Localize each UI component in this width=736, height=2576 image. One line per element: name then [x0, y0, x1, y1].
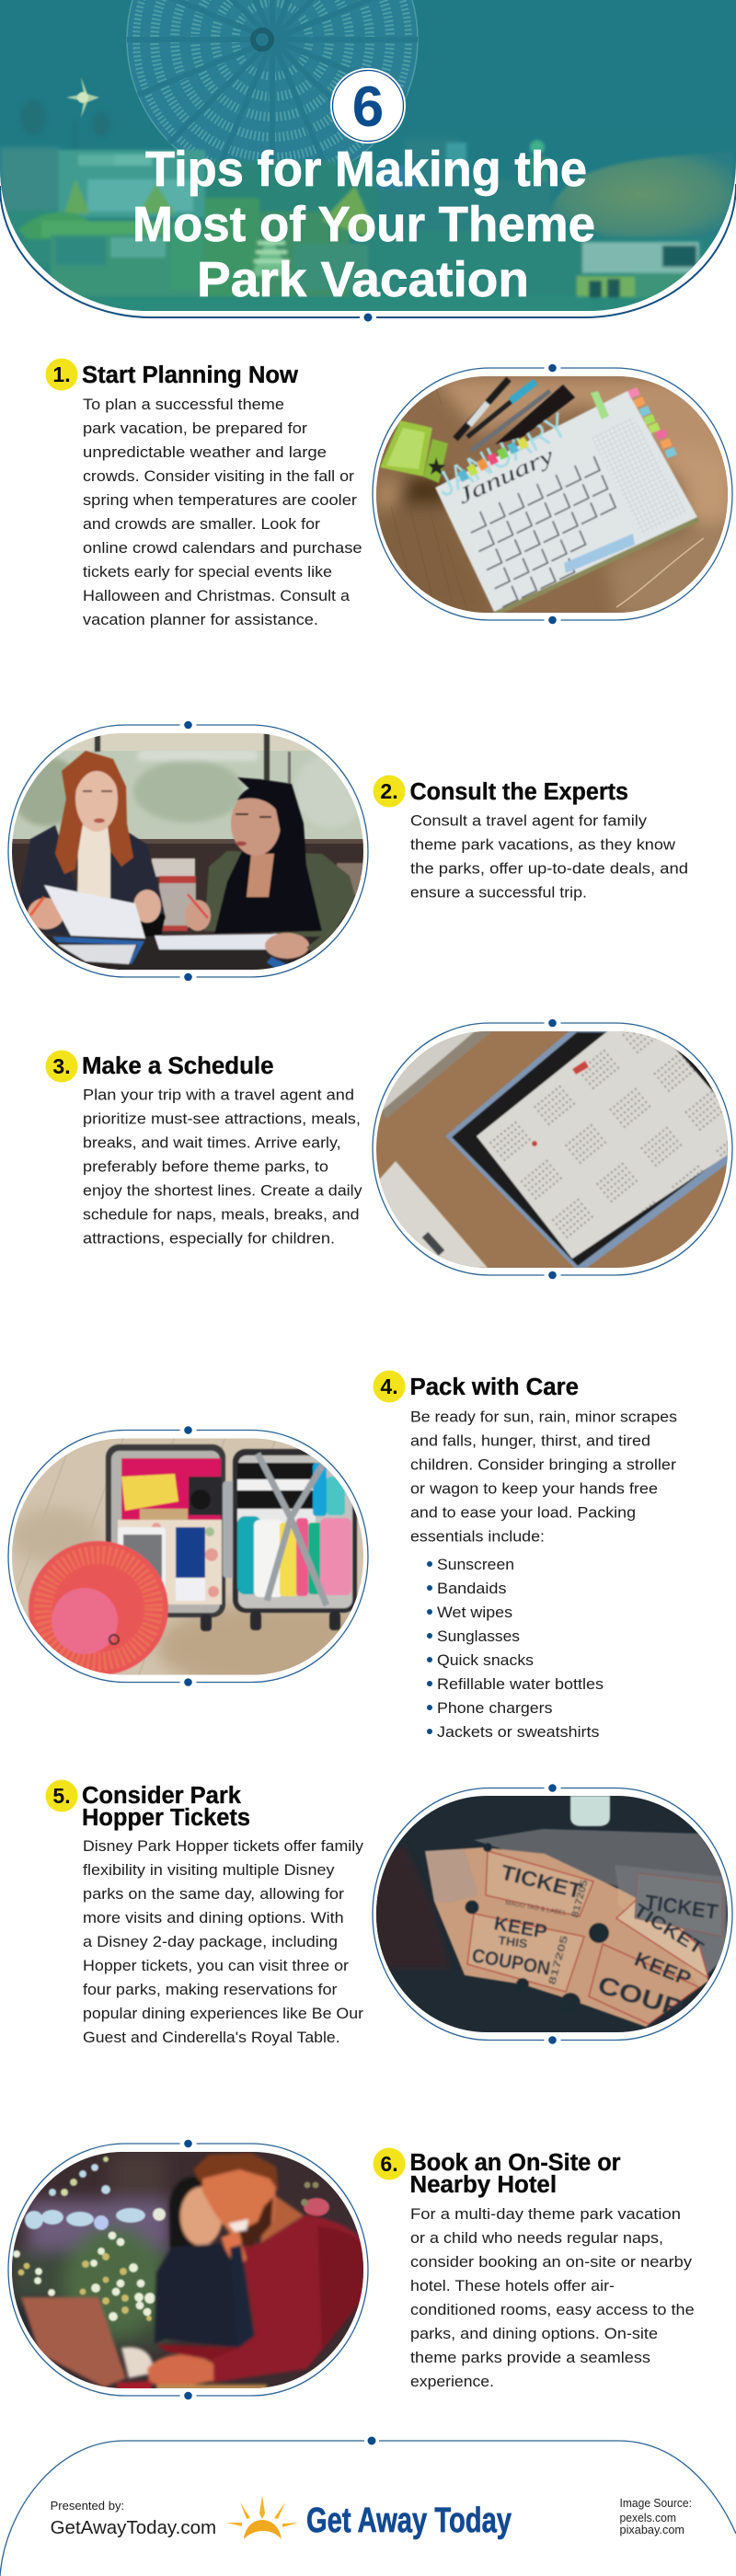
photo outline 3: [373, 1019, 732, 1279]
title: Tips for Making the: [145, 142, 587, 197]
presented by: Presented by:: [51, 2499, 124, 2513]
body text 3: enjoy the shortest lines. Create a daily: [83, 1183, 362, 1200]
badge: number 3: [46, 1051, 77, 1082]
photo outline 2: [8, 721, 368, 981]
body text 1: online crowd calendars and purchase: [83, 540, 362, 557]
section 6: book an on-site or nearby hotel: [7, 2140, 695, 2399]
body text 3: Plan your trip with a travel agent and: [83, 1087, 354, 1104]
body text 4: and falls, hunger, thirst, and tired: [410, 1433, 650, 1450]
number badge: 6: [330, 68, 406, 144]
body text 1: tickets early for special events like: [83, 564, 332, 581]
body text 1: and crowds are smaller. Look for: [83, 516, 321, 533]
title: [132, 142, 595, 307]
footer outline with dot: [0, 2436, 736, 2576]
footer: [0, 2436, 736, 2576]
body text 5: Guest and Cinderella's Royal Table.: [83, 2030, 340, 2046]
body text 4: [410, 1409, 677, 1546]
badge: number 1: [46, 359, 77, 390]
badge: number 1: 1.: [52, 362, 71, 386]
badge: number 2: 2.: [380, 779, 398, 803]
body text 4: Be ready for sun, rain, minor scrapes: [410, 1409, 677, 1426]
packing essentials list: [427, 1557, 604, 1741]
packing essentials list: Sunglasses: [437, 1628, 520, 1645]
badge: number 3: 3.: [52, 1054, 71, 1078]
packing essentials list: Jackets or sweatshirts: [437, 1724, 600, 1741]
body text 1: unpredictable weather and large: [83, 444, 327, 461]
badge: number 5: [46, 1779, 77, 1812]
heading 6: Book an On-Site or: [410, 2150, 621, 2176]
heading 6: [410, 2150, 621, 2198]
body text 2: Consult a travel agent for family: [410, 813, 648, 830]
photo: roll of vintage paper tickets: TICKET: [629, 1901, 707, 1959]
body text 6: or a child who needs regular naps,: [410, 2230, 663, 2247]
icon: sun: [226, 2495, 298, 2539]
body text 2: ensure a successful trip.: [410, 885, 587, 902]
presented by: [51, 2499, 216, 2538]
heading 5: Consider Park: [82, 1783, 242, 1809]
photo: roll of vintage paper tickets: KEEP: [492, 1913, 548, 1943]
number badge: 6: 6: [352, 75, 384, 139]
photo: roll of vintage paper tickets: 817205: [546, 1935, 570, 1986]
photo: roll of vintage paper tickets: [373, 1784, 733, 2044]
packing essentials list: Sunscreen: [437, 1557, 514, 1573]
packing essentials list: Bandaids: [437, 1581, 506, 1597]
body text 3: preferably before theme parks, to: [83, 1159, 328, 1176]
body text 1: vacation planner for assistance.: [83, 612, 318, 628]
body text 5: Hopper tickets, you can visit three or: [83, 1958, 350, 1974]
body text 5: flexibility in visiting multiple Disney: [83, 1862, 335, 1879]
body text 3: [83, 1087, 362, 1248]
body text 1: park vacation, be prepared for: [83, 420, 308, 437]
header outline with dot: [0, 184, 736, 322]
heading 5: [82, 1783, 250, 1831]
title: Park Vacation: [197, 252, 529, 307]
packing essentials list: Phone chargers: [437, 1700, 552, 1717]
heading 3: Make a Schedule: [82, 1053, 274, 1079]
body text 6: For a multi-day theme park vacation: [410, 2206, 681, 2223]
photo outline 1: [373, 364, 732, 624]
photo: open suitcase and red sun hat: [7, 1426, 396, 1693]
packing essentials list: Quick snacks: [437, 1652, 534, 1669]
body text 1: spring when temperatures are cooler: [83, 492, 358, 509]
body text 5: more visits and dining options. With: [83, 1910, 344, 1926]
photo outline 5: [373, 1784, 732, 2044]
section 2: consult the experts: [7, 721, 688, 981]
logo: Get Away Today: Get Away Today: [306, 2501, 512, 2540]
body text 1: [83, 397, 362, 628]
photo: roll of vintage paper tickets: 817205: [569, 1879, 591, 1919]
body text 2: [410, 813, 688, 902]
body text 5: four parks, making reservations for: [83, 1982, 338, 1998]
photo: roll of vintage paper tickets: COUP: [594, 1971, 686, 2023]
photo: roll of vintage paper tickets: KEEP: [631, 1947, 695, 1991]
badge: number 2: [374, 775, 405, 808]
body text 6: conditioned rooms, easy access to the: [410, 2302, 695, 2318]
presented by: GetAwayToday.com: [51, 2518, 216, 2538]
image source: pixabay.com: [620, 2523, 684, 2536]
heading 5: Hopper Tickets: [82, 1805, 250, 1831]
heading 6: Nearby Hotel: [410, 2172, 557, 2198]
header photo: theme park at night with teal overlay: [0, 0, 736, 317]
badge: number 5: 5.: [52, 1784, 71, 1808]
packing essentials list: Wet wipes: [437, 1604, 512, 1621]
section 4: pack with care: [7, 1371, 677, 1741]
badge: number 6: [374, 2147, 405, 2180]
body text 4: children. Consider bringing a stroller: [410, 1457, 677, 1474]
body text 6: parks, and dining options. On-site: [410, 2326, 658, 2342]
body text 6: experience.: [410, 2374, 494, 2390]
body text 1: Halloween and Christmas. Consult a: [83, 588, 351, 604]
section 3: make a schedule: [46, 1019, 736, 1279]
body text 5: a Disney 2-day package, including: [83, 1934, 338, 1950]
photo outline 6: [8, 2140, 368, 2399]
body text 2: the parks, offer up-to-date deals, and: [410, 861, 688, 878]
body text 3: breaks, and wait times. Arrive early,: [83, 1135, 341, 1152]
body text 6: [410, 2206, 695, 2390]
body text 4: essentials include:: [410, 1529, 545, 1546]
body text 1: crowds. Consider visiting in the fall or: [83, 468, 355, 485]
heading 2: Consult the Experts: [410, 779, 628, 805]
photo outline 4: [8, 1426, 368, 1686]
section 5: consider park hopper tickets: [46, 1779, 733, 2046]
body text 3: schedule for naps, meals, breaks, and: [83, 1207, 359, 1224]
heading 1: Start Planning Now: [82, 362, 298, 388]
photo: roll of vintage paper tickets: THIS: [498, 1933, 529, 1950]
image source: [620, 2496, 692, 2536]
image source: Image Source:: [620, 2496, 692, 2510]
logo: Get Away Today: [226, 2495, 512, 2540]
photo: calendar notebook on wooden table: [373, 364, 736, 624]
header banner: [0, 0, 736, 322]
badge: number 4: 4.: [380, 1374, 398, 1398]
photo: travel agent and client reviewing papers: [7, 721, 368, 981]
body text 3: prioritize must-see attractions, meals,: [83, 1111, 361, 1128]
photo: roll of vintage paper tickets: TICKET: [499, 1860, 584, 1903]
photo: roll of vintage paper tickets: COUPON: [470, 1945, 552, 1980]
title: Most of Your Theme: [132, 197, 595, 252]
section 1: start planning now: [46, 359, 736, 628]
image source: pexels.com: [620, 2511, 676, 2524]
body text 5: popular dining experiences like Be Our: [83, 2006, 364, 2022]
body text 4: or wagon to keep your hands free: [410, 1481, 658, 1498]
body text 4: and to ease your load. Packing: [410, 1505, 636, 1522]
badge: number 4: [374, 1371, 405, 1402]
body text 5: parks on the same day, allowing for: [83, 1886, 345, 1903]
photo: tablet showing calendar on desk: [373, 1019, 736, 1279]
body text 6: consider booking an on-site or nearby: [410, 2254, 693, 2271]
body text 5: Disney Park Hopper tickets offer family: [83, 1838, 364, 1855]
body text 6: hotel. These hotels offer air-: [410, 2278, 615, 2294]
photo: couple using laptop with bokeh lights: [7, 2140, 368, 2399]
body text 6: theme parks provide a seamless: [410, 2350, 650, 2366]
body text 1: To plan a successful theme: [83, 397, 284, 413]
body text 3: attractions, especially for children.: [83, 1231, 335, 1248]
badge: number 6: 6.: [380, 2152, 398, 2176]
photo: calendar notebook on wooden table: JANUARY: [430, 406, 574, 505]
photo: roll of vintage paper tickets: MAGO TAG & LABEL: [505, 1900, 567, 1917]
body text 5: [83, 1838, 364, 2046]
heading 4: Pack with Care: [410, 1374, 579, 1400]
photo: calendar notebook on wooden table: January: [454, 443, 558, 509]
packing essentials list: Refillable water bottles: [437, 1676, 604, 1693]
photo: roll of vintage paper tickets: TICKET: [643, 1890, 719, 1924]
body text 2: theme park vacations, as they know: [410, 837, 675, 854]
